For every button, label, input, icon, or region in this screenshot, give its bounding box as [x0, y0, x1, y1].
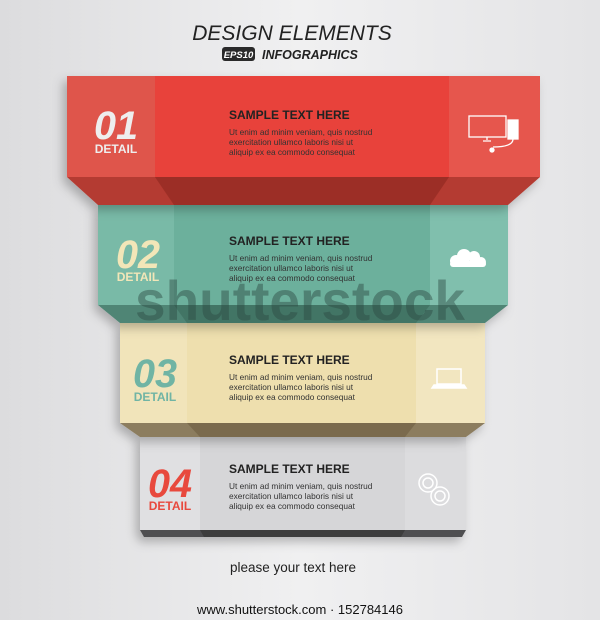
panel: step 1 [67, 76, 540, 205]
text block 3: Ut enim ad minim veniam, quis nostrud [229, 372, 373, 382]
text block 2 [229, 234, 373, 283]
subtitle [222, 47, 358, 62]
watermark: shutterstock [135, 269, 466, 332]
number 04: DETAIL [149, 499, 191, 513]
text block 3: SAMPLE TEXT HERE [229, 353, 350, 367]
text block 3: exercitation ullamco laboris nisi ut [229, 382, 354, 392]
icon: laptop [432, 369, 466, 388]
text block 4: Ut enim ad minim veniam, quis nostrud [229, 481, 373, 491]
subtitle: INFOGRAPHICS [262, 48, 358, 62]
number 03: DETAIL [134, 390, 176, 404]
title: DESIGN ELEMENTS [192, 22, 392, 45]
text block 1: aliquip ex ea commodo consequat [229, 147, 356, 157]
number 02: DETAIL [117, 270, 159, 284]
text block 2: exercitation ullamco laboris nisi ut [229, 263, 354, 273]
panel: step 2 [98, 205, 508, 323]
icon: cloud [450, 249, 486, 267]
text block 3 [229, 353, 373, 402]
icon: gears [419, 474, 449, 505]
text block 2: aliquip ex ea commodo consequat [229, 273, 356, 283]
text block 4: exercitation ullamco laboris nisi ut [229, 491, 354, 501]
number 01: 01 [94, 104, 138, 148]
text block 4: aliquip ex ea commodo consequat [229, 501, 356, 511]
footer caption: please your text here [230, 560, 356, 575]
text block 2: SAMPLE TEXT HERE [229, 234, 350, 248]
panel: step 3 [120, 323, 485, 437]
number 01: DETAIL [95, 142, 137, 156]
text block 1: exercitation ullamco laboris nisi ut [229, 137, 354, 147]
text block 4: SAMPLE TEXT HERE [229, 462, 350, 476]
text block 1 [229, 108, 373, 157]
subtitle: EPS10 [224, 50, 254, 61]
text block 4 [229, 462, 373, 511]
footer url: www.shutterstock.com · 152784146 [196, 602, 403, 617]
text block 1: SAMPLE TEXT HERE [229, 108, 350, 122]
text block 3: aliquip ex ea commodo consequat [229, 392, 356, 402]
text block 2: Ut enim ad minim veniam, quis nostrud [229, 253, 373, 263]
number 03: 03 [133, 352, 177, 396]
panel: step 4 [140, 437, 466, 537]
number 02: 02 [116, 233, 160, 277]
text block 1: Ut enim ad minim veniam, quis nostrud [229, 127, 373, 137]
number 04: 04 [148, 462, 192, 506]
icon: computer [469, 116, 518, 152]
